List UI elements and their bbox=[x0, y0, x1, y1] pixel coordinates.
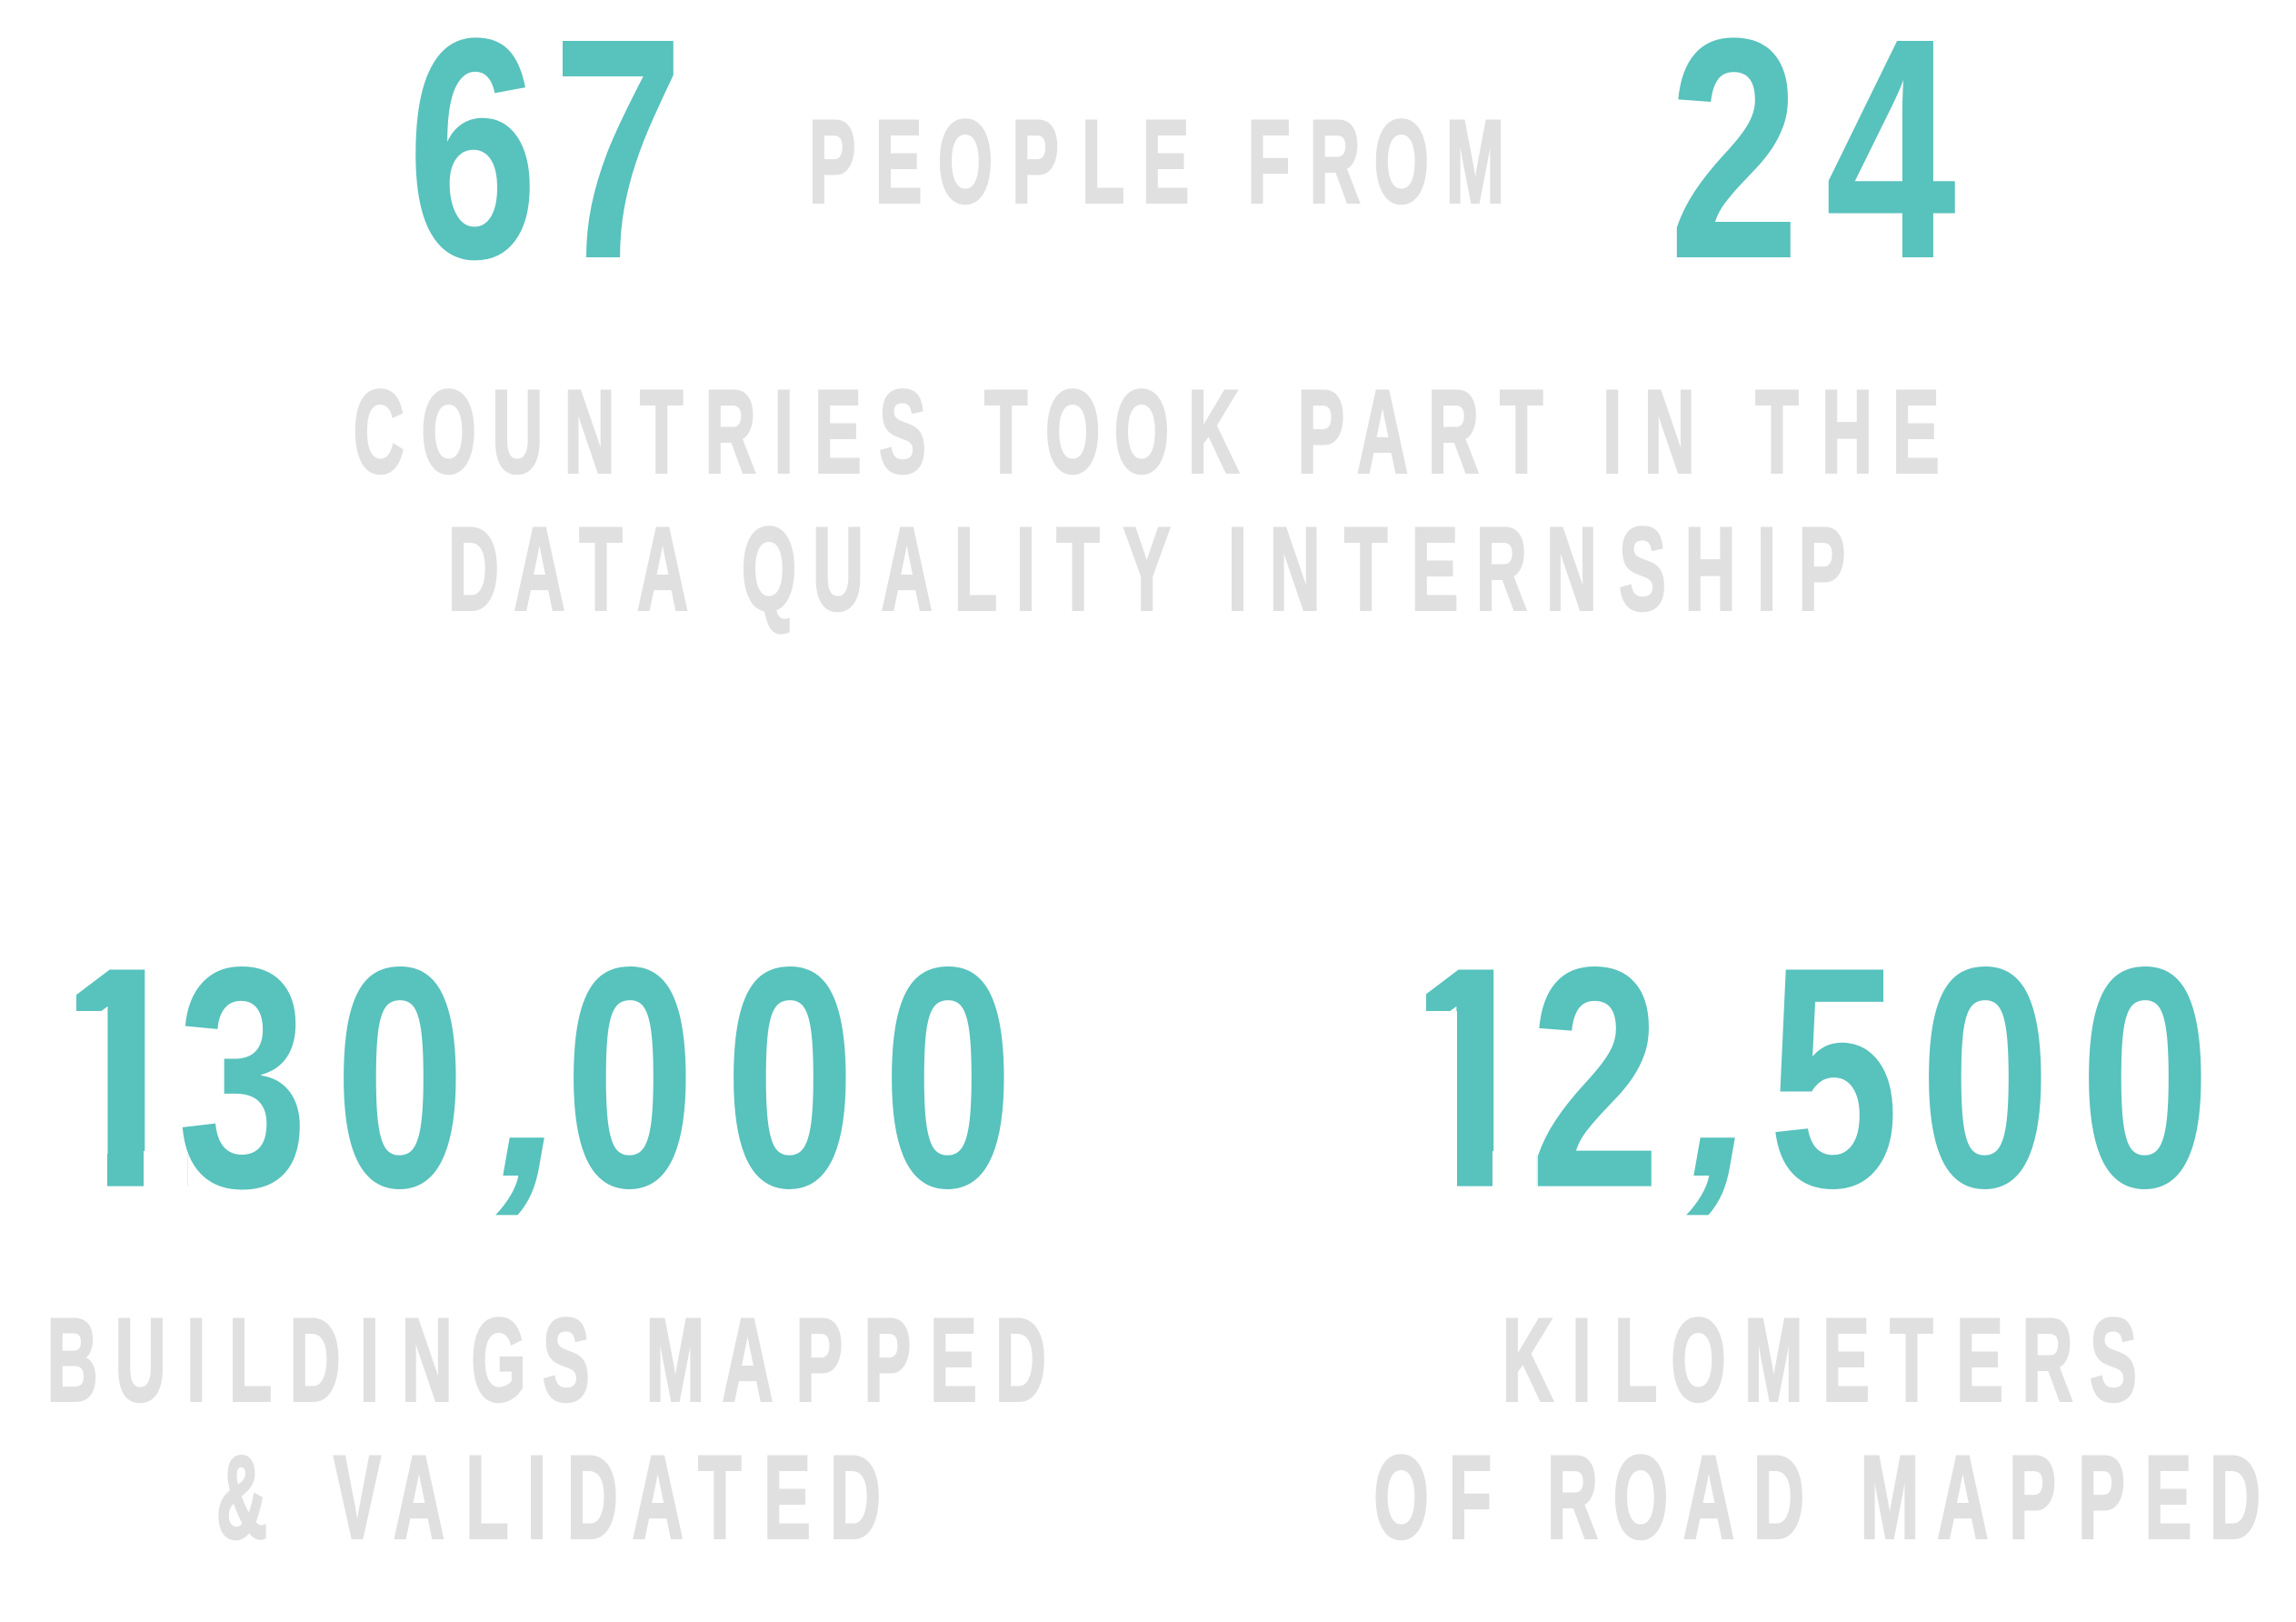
number: 130,000: 30 bbox=[177, 901, 465, 1253]
text: people from: PEOPLE FROM bbox=[809, 95, 1504, 227]
number: 12,500 bbox=[1363, 901, 2211, 1254]
panel: participants statistic bbox=[354, 0, 1958, 635]
number: 12,500: 1 bbox=[1393, 903, 1543, 1254]
number: 130,000: , bbox=[476, 945, 594, 1230]
number: 12,500: 500 bbox=[1768, 901, 2211, 1253]
number: 130,000: 1 bbox=[45, 903, 195, 1254]
text: countries took part in the: COUNTRIES TOOK PART IN THE bbox=[354, 365, 1940, 497]
text: buildings mapped: BUILDINGS MAPPED bbox=[46, 1294, 1046, 1426]
text: of road mapped: OF ROAD MAPPED bbox=[1373, 1431, 2261, 1563]
text: data quality internship: DATA QUALITY INTERNSHIP bbox=[448, 503, 1845, 635]
panel: buildings statistic bbox=[36, 901, 1046, 1563]
number: 12,500: , bbox=[1667, 945, 1785, 1230]
number: 130,000 bbox=[36, 901, 1013, 1254]
text: and validated: & VALIDATED bbox=[216, 1431, 881, 1563]
text: kilometers: KILOMETERS bbox=[1502, 1294, 2137, 1426]
number: 130,000: 000 bbox=[564, 901, 1013, 1253]
panel: roads statistic bbox=[1363, 901, 2261, 1563]
number: 12,500: 2 bbox=[1530, 901, 1661, 1253]
